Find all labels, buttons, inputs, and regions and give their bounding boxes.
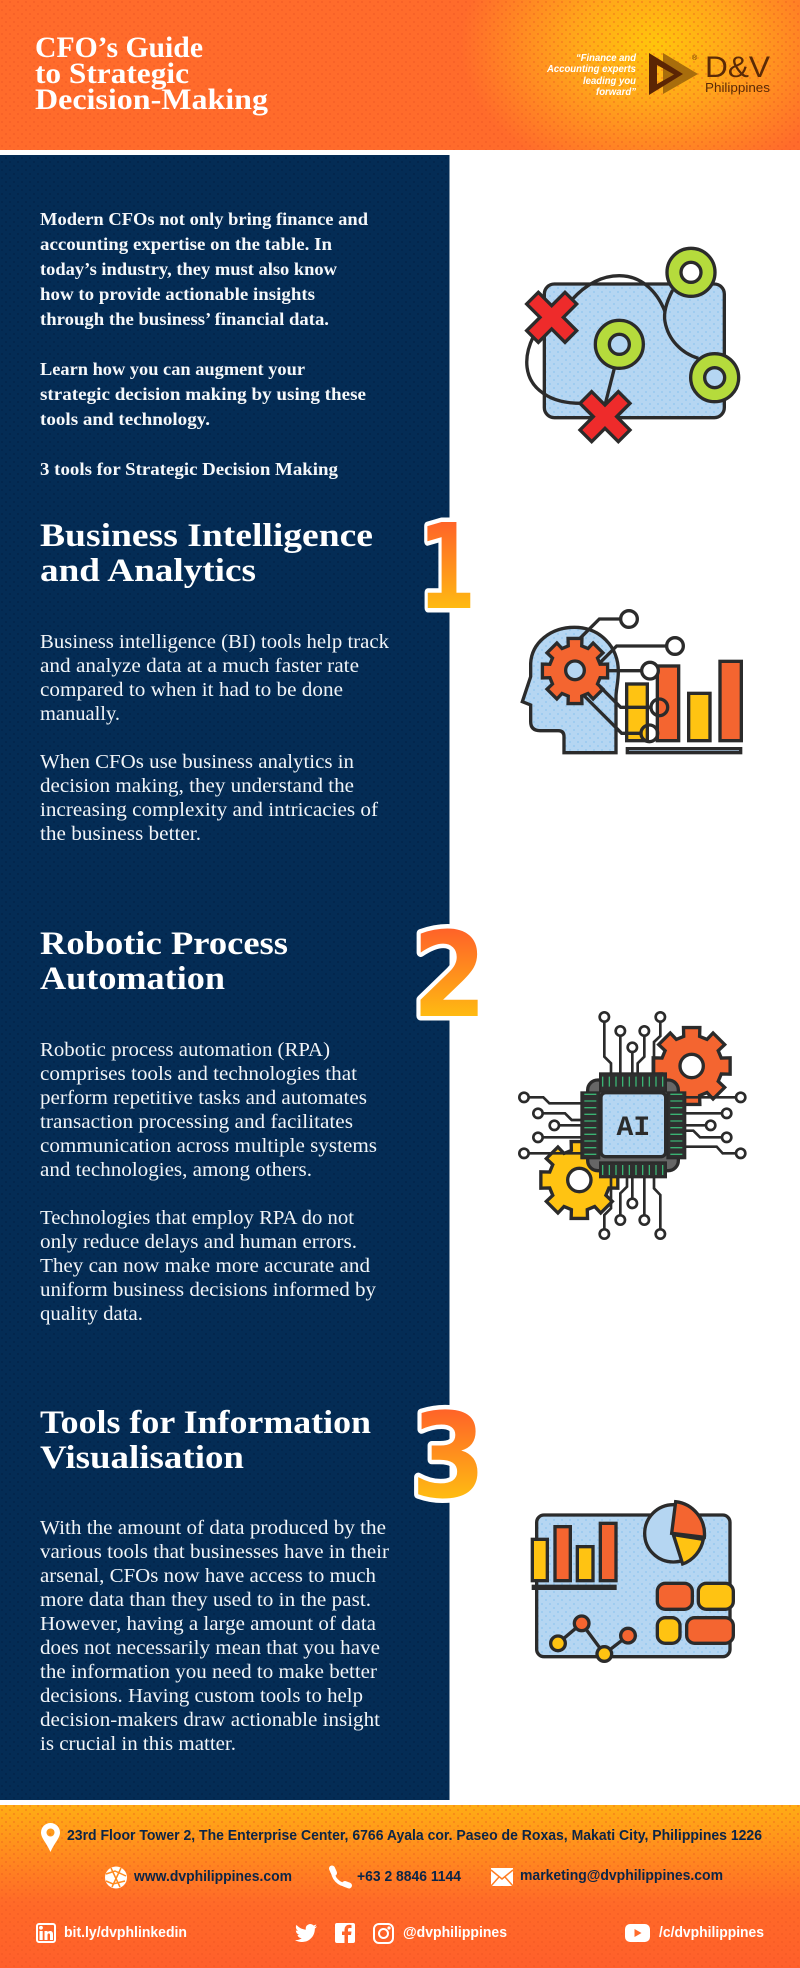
body text: section 2: perform repetitive tasks and automates (40, 1087, 367, 1109)
intro text: through the business’ financial data. (40, 309, 329, 329)
tagline: forward” (596, 86, 637, 98)
tagline: Accounting experts (546, 63, 636, 75)
icon: AI chip with gears (519, 1012, 745, 1239)
intro text: strategic decision making by using these (40, 384, 366, 404)
title: to Strategic (35, 57, 189, 90)
website: www.dvphilippines.com (133, 1868, 292, 1885)
body text: section 1: manually. (40, 703, 120, 725)
icon: mail (491, 1868, 513, 1886)
icon: Twitter (295, 1924, 317, 1942)
body text: section 2: They can now make more accurate and (40, 1255, 370, 1277)
heading: Robotic Process Automation (40, 926, 288, 997)
body text: section 2: comprises tools and technologies that (40, 1063, 357, 1085)
body text: section 1 (40, 631, 389, 845)
intro text: today’s industry, they must also know (40, 259, 337, 279)
header banner (0, 0, 800, 150)
number 2: 2 (412, 906, 487, 1044)
body text: section 1: When CFOs use business analytics in (40, 751, 354, 773)
social handle: @dvphilippines (403, 1924, 507, 1941)
body text: section 3: more data than they used to in the past. (40, 1589, 371, 1611)
body text: section 1: compared to when it had to be done (40, 679, 343, 701)
number 1: 1 (418, 498, 476, 636)
title: CFO’s Guide (35, 31, 203, 64)
body text: section 3: decision-makers draw actionable insight (40, 1709, 380, 1731)
number 3: 3 (411, 1387, 486, 1525)
footer band (0, 1805, 800, 1968)
title: Decision-Making (35, 83, 268, 116)
icon: YouTube (625, 1924, 650, 1942)
intro text: Learn how you can augment your (40, 359, 305, 379)
body text: section 2: and technologies, among others. (40, 1159, 312, 1181)
icon: Instagram (374, 1924, 393, 1943)
body text: section 3: the information you need to make better (40, 1661, 377, 1683)
body text: section 3: With the amount of data produced by the (40, 1517, 386, 1539)
body text: section 3: various tools that businesses have in their (40, 1541, 389, 1563)
tagline (546, 52, 637, 98)
icon: phone (332, 1868, 349, 1886)
intro text: tools and technology. (40, 409, 210, 429)
icon: head with gear and bars (522, 611, 741, 753)
body text: section 2: communication across multiple systems (40, 1135, 377, 1157)
body text: section 3: does not necessarily mean that you have (40, 1637, 380, 1659)
body text: section 2: Robotic process automation (RPA) (40, 1039, 330, 1061)
intro text: accounting expertise on the table. In (40, 234, 332, 254)
body text: section 2: quality data. (40, 1303, 143, 1325)
intro text: Modern CFOs not only bring finance and (40, 209, 368, 229)
intro text (40, 209, 368, 479)
icon: AI chip with gears: AI (617, 1113, 650, 1144)
body text: section 2 (40, 1039, 377, 1325)
body text: section 1: the business better. (40, 823, 201, 845)
heading: Tools for Information Visualisation (40, 1405, 371, 1476)
tagline: leading you (583, 75, 637, 87)
body text: section 3: is crucial in this matter. (40, 1733, 236, 1755)
body text: section 3: decisions. Having custom tools to help (40, 1685, 363, 1707)
icon: location pin (41, 1823, 60, 1852)
body text: section 2: only reduce delays and human errors. (40, 1231, 357, 1253)
heading: Business Intelligence and Analytics: and Analytics (40, 553, 256, 589)
phone number: +63 2 8846 1144 (357, 1868, 462, 1885)
body text: section 2: Technologies that employ RPA do not (40, 1207, 354, 1229)
body text: section 3: However, having a large amount of data (40, 1613, 376, 1635)
body text: section 1: decision making, they understand the (40, 775, 354, 797)
logo: D&V Philippines: Philippines (705, 80, 771, 95)
heading: Robotic Process Automation: Automation (40, 961, 225, 997)
icon: data dashboard (532, 1502, 733, 1661)
body text: section 3 (40, 1517, 389, 1755)
heading: Robotic Process Automation: Robotic Process (40, 926, 288, 962)
icon: Facebook (335, 1923, 355, 1943)
icon: map with route (527, 248, 739, 442)
body text: section 1: increasing complexity and intricacies of (40, 799, 378, 821)
heading: Business Intelligence and Analytics (40, 518, 373, 589)
body text: section 3: arsenal, CFOs now have access to much (40, 1565, 376, 1587)
title (35, 31, 268, 116)
panel: navy text column (0, 155, 450, 1800)
body text: section 2: transaction processing and facilitates (40, 1111, 353, 1133)
heading: Tools for Information Visualisation: Tools for Information (40, 1405, 371, 1441)
address: 23rd Floor Tower 2, The Enterprise Center, 6766 Ayala cor. Paseo de Roxas, Makati City, Philippines 1226 (67, 1827, 762, 1844)
logo: D&V Philippines (649, 51, 771, 95)
heading: Tools for Information Visualisation: Visualisation (40, 1440, 244, 1476)
heading: Business Intelligence and Analytics: Business Intelligence (40, 518, 373, 554)
tagline: “Finance and (576, 52, 637, 64)
body text: section 1: and analyze data at a much faster rate (40, 655, 359, 677)
body text: section 2: uniform business decisions informed by (40, 1279, 376, 1301)
icon: LinkedIn (37, 1924, 55, 1942)
logo: D&V Philippines: ® (692, 54, 698, 62)
LinkedIn handle: bit.ly/dvphlinkedin (64, 1924, 187, 1941)
icon: globe (105, 1866, 127, 1888)
email: marketing@dvphilippines.com (520, 1867, 723, 1884)
body text: section 1: Business intelligence (BI) tools help track (40, 631, 389, 653)
logo: D&V Philippines: D&V (705, 51, 770, 84)
intro text: 3 tools for Strategic Decision Making (40, 459, 338, 479)
intro text: how to provide actionable insights (40, 284, 315, 304)
YouTube handle: /c/dvphilippines (659, 1924, 764, 1941)
